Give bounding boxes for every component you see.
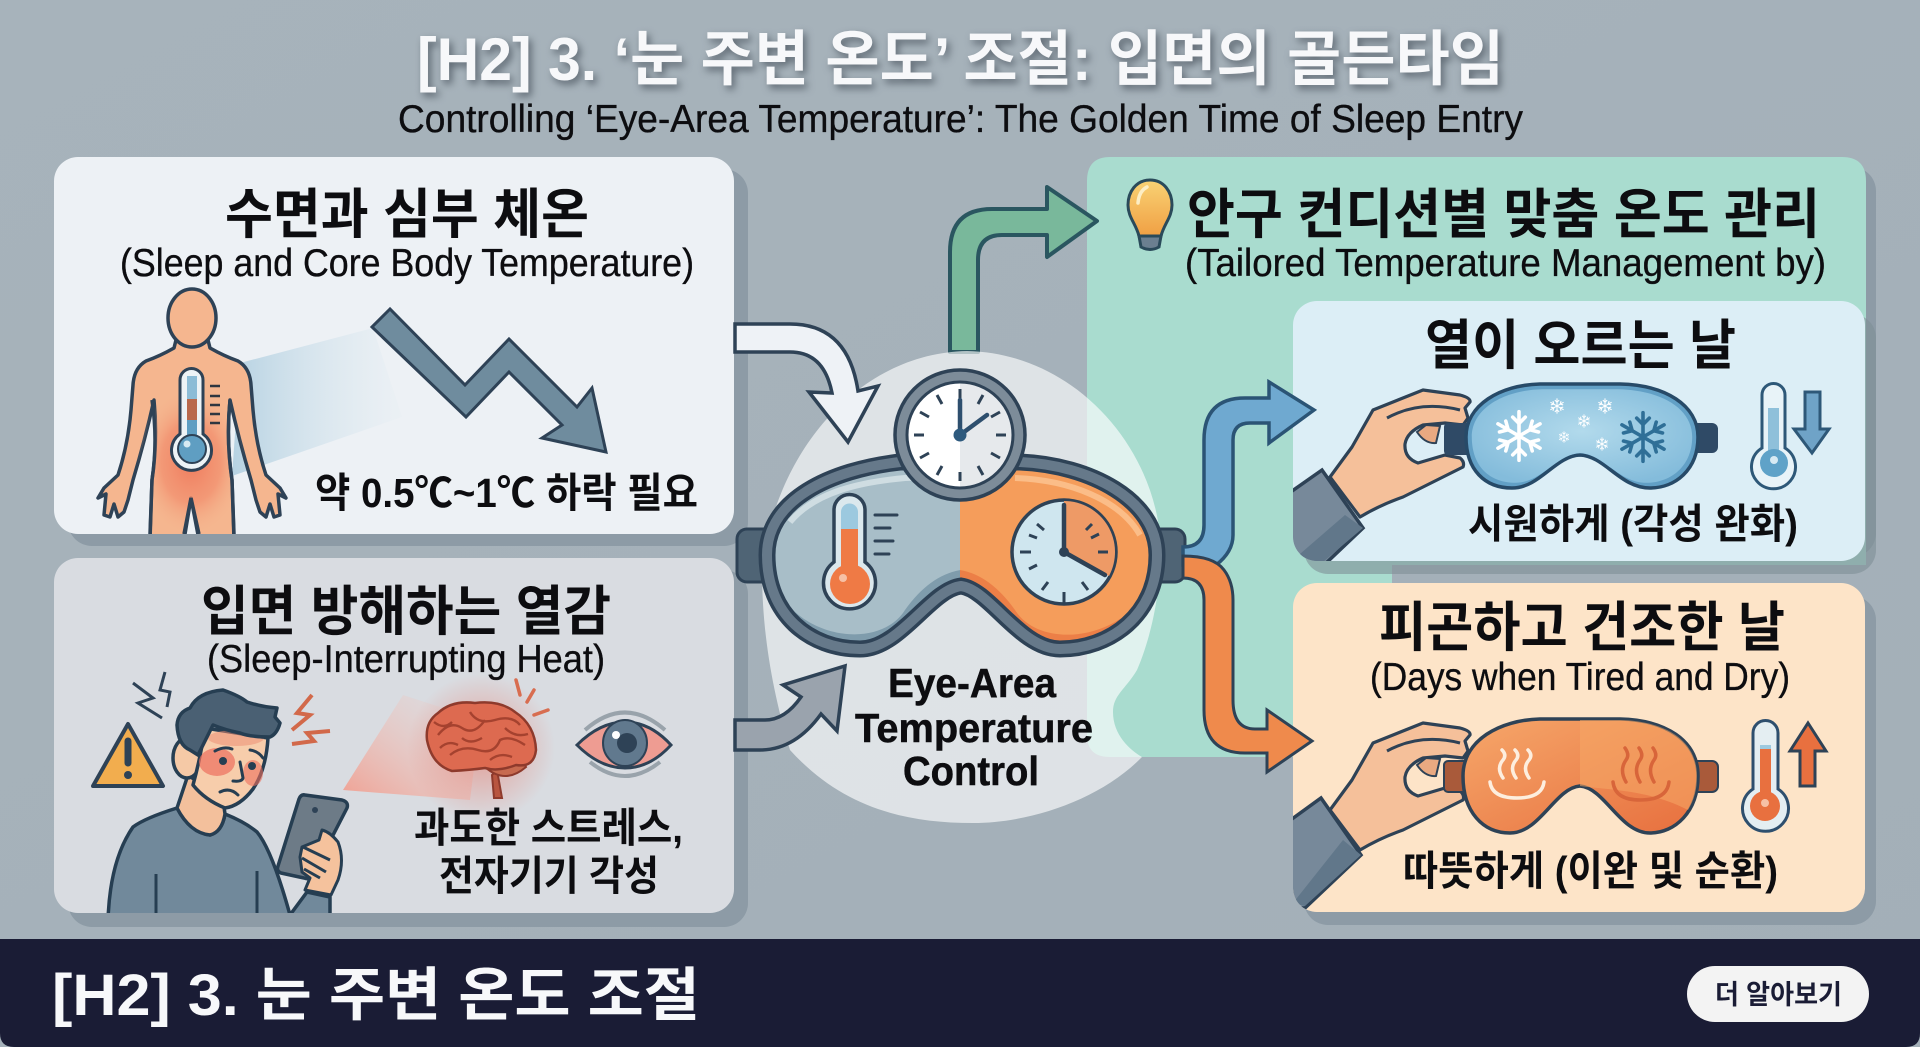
icon: overheated brain: [407, 674, 555, 822]
center circle backdrop: [762, 351, 1160, 823]
center label: [855, 660, 1093, 794]
strap right: [1145, 529, 1185, 582]
icon: red eye: [577, 712, 671, 776]
face: [193, 728, 268, 808]
arrow: blue to cool panel: [1183, 382, 1314, 565]
heat beam from body: [232, 328, 402, 476]
arrow: orange to warm panel: [1183, 556, 1312, 772]
english subheading: tired and dry: (Days when Tired and Dry): [1370, 656, 1790, 699]
clock on top: [895, 370, 1025, 500]
sweater: [108, 808, 330, 920]
text: stress and devices: [414, 805, 683, 899]
arrow: from heat to center: [735, 666, 845, 750]
thermometer on lens: [824, 494, 897, 609]
icon: orange lightning: [292, 695, 330, 744]
strap left: [737, 529, 777, 582]
hand: [300, 830, 342, 895]
title: [H2] 3. ‘눈 주변 온도’ 조절: 입면의 골든타임: [417, 26, 1504, 93]
neck: [177, 775, 225, 835]
icon: up arrow: [1790, 723, 1826, 786]
icon: human body with thermometer: [98, 289, 286, 540]
panel: tailored temperature management background: [1087, 157, 1876, 757]
button: learn more: [1687, 966, 1869, 1022]
heading: fever days: 열이 오르는 날: [1425, 316, 1736, 376]
eyes and mouth: [215, 748, 263, 795]
hair: [177, 690, 280, 755]
sleeve and hand holding warm mask: [1285, 723, 1470, 908]
text: stress and devices: 전자기기 각성: [439, 853, 659, 899]
heading: heat: 입면 방해하는 열감: [201, 582, 611, 642]
strap: warm mask: [1444, 761, 1718, 792]
person with phone: [108, 690, 347, 920]
panel: fever days: [1285, 301, 1876, 574]
icon: light bulb: [1128, 180, 1172, 250]
arrow: temperature falling zigzag: [372, 309, 606, 452]
english subheading: heat: (Sleep-Interrupting Heat): [207, 638, 605, 681]
button: learn more: 더 알아보기: [1715, 980, 1842, 1010]
clock on lens: [1012, 500, 1116, 604]
english subheading: core body: (Sleep and Core Body Temperature): [120, 242, 694, 285]
goggles frame: [767, 462, 1157, 649]
center label: Eye-Area: [888, 660, 1057, 706]
text: stress and devices: 과도한 스트레스,: [414, 805, 683, 851]
heading: core body: 수면과 심부 체온: [225, 185, 589, 245]
center label: Control: [903, 748, 1039, 794]
goggles illustration: [737, 370, 1185, 649]
ear: [173, 738, 201, 778]
lens left half: [776, 470, 960, 640]
icon: dark lightning: [133, 672, 170, 718]
cool eye mask: [1466, 384, 1698, 488]
blush: [199, 748, 235, 776]
arrow: green to tailored panel: [950, 187, 1097, 352]
text: cool: 시원하게 (각성 완화): [1468, 501, 1798, 547]
phone: [277, 795, 347, 879]
subtitle: Controlling ‘Eye-Area Temperature’: The Golden Time of Sleep Entry: [398, 98, 1523, 141]
text: warm: 따뜻하게 (이완 및 순환): [1403, 848, 1778, 894]
footer title: [H2] 3. 눈 주변 온도 조절: [52, 963, 700, 1028]
beam from phone to brain: [343, 695, 480, 800]
center label: Temperature: [855, 705, 1093, 751]
icon: warning triangle: [93, 724, 163, 786]
sleeve and hand holding cool mask: [1285, 390, 1470, 566]
text: temperature drop: 약 0.5℃~1℃ 하락 필요: [315, 470, 698, 516]
icon: warm thermometer: [1742, 720, 1789, 831]
panel: sleep and core body temperature: [54, 157, 748, 546]
warm eye mask: [1463, 719, 1698, 833]
strap: cool mask: [1444, 423, 1718, 455]
icon: cool thermometer: [1752, 384, 1796, 489]
arrow: from body temperature to center: [735, 324, 878, 442]
footer bar: [0, 939, 1920, 1047]
panel: tired and dry days: [1285, 583, 1876, 925]
english subheading: tailored: (Tailored Temperature Management by): [1185, 242, 1826, 285]
heading: tailored: 안구 컨디션별 맞춤 온도 관리: [1187, 185, 1820, 245]
lens right half: [960, 470, 1148, 640]
icon: down arrow: [1794, 392, 1829, 453]
panel: sleep-interrupting heat: [54, 558, 748, 927]
heading: tired and dry: 피곤하고 건조한 날: [1379, 598, 1785, 658]
